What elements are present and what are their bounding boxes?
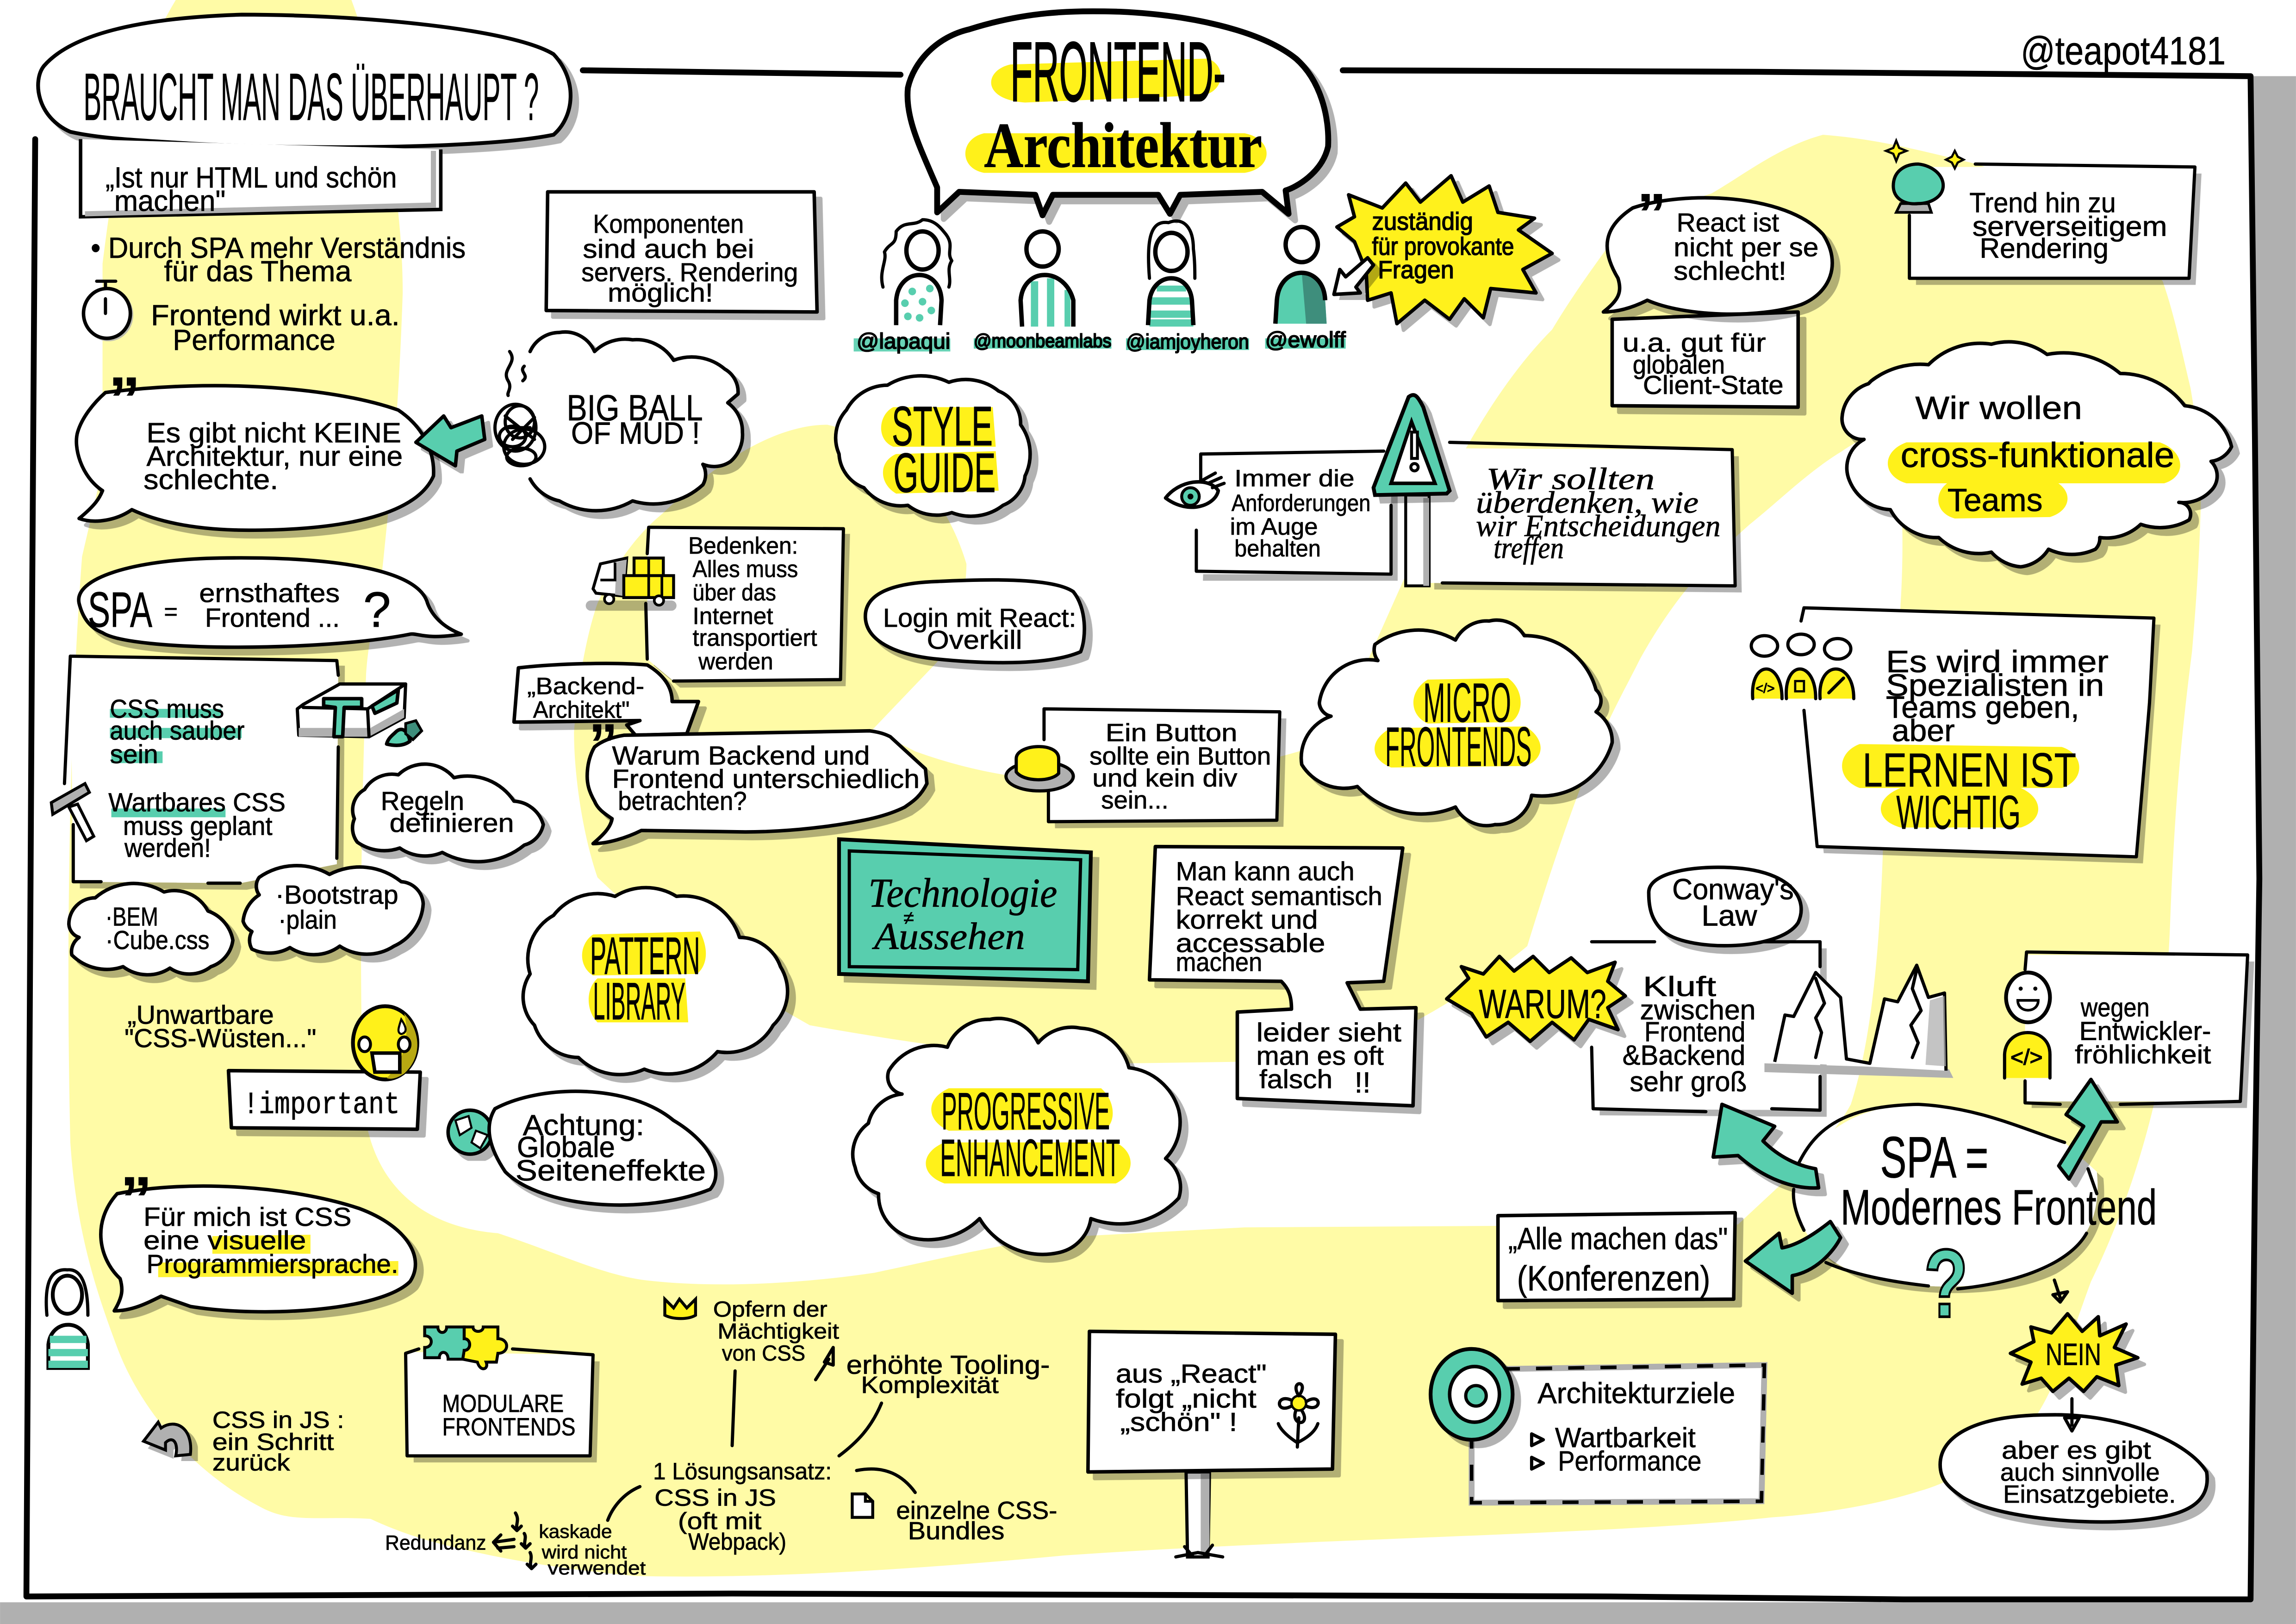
- text: 1 Lösungsansatz CSS in JS: (oft mit: [678, 1508, 761, 1534]
- box: Modulare Frontends: [405, 1349, 593, 1456]
- bubble: Achtung globale Seiteneffekte: [489, 1091, 716, 1205]
- arrow: teal from ball of mud: [416, 416, 485, 466]
- text: 1 Lösungsansatz CSS in JS: CSS in JS: [654, 1484, 776, 1511]
- text: Unwartbare CSS-Wüsten: „Unwartbare: [127, 1000, 274, 1030]
- box: Komponenten: servers. Rendering: [581, 257, 798, 287]
- quote bubble: React ist nicht per se schlecht: [1603, 181, 1832, 314]
- box: Modulare Frontends: MODULARE: [442, 1390, 564, 1418]
- bubble: aber es gibt sinnvolle Einsatzgebiete: Einsatzgebiete.: [2003, 1480, 2176, 1508]
- cloud: Wir wollen cross-funktionale Teams: cross-funktionale: [1901, 436, 2174, 475]
- box: !important: [229, 1071, 420, 1129]
- icon: three developers: </>: [1755, 681, 1775, 696]
- bubble: SPA = ernsthaftes Frontend: ernsthaftes: [199, 578, 340, 608]
- text: Kaskade wird nicht verwendet: kaskade: [539, 1521, 612, 1542]
- text: Durch SPA: • Durch SPA mehr Verständnis: [91, 232, 466, 264]
- quote bubble: Es gibt nicht KEINE Architektur: Es gibt nicht KEINE: [146, 417, 401, 448]
- quote bubble: Es gibt nicht KEINE Architektur: [76, 364, 434, 530]
- sign: aus React folgt nicht schön: [1088, 1331, 1335, 1557]
- icon: truck: [586, 558, 677, 611]
- icon: crystal ball: [1886, 141, 1964, 212]
- quote bubble: Warum Backend und Frontend: ”: [589, 711, 618, 777]
- cloud: BEM Cube.css: [69, 883, 233, 975]
- box: Kluft zwischen Frontend und Backend: sehr groß: [1630, 1066, 1747, 1097]
- box: CSS muss sauber sein: muss geplant: [123, 811, 273, 841]
- quote bubble: Es gibt nicht KEINE Architektur: ”: [108, 364, 141, 436]
- box: wegen Entwicklerfröhlichkeit: fröhlichkeit: [2075, 1040, 2211, 1069]
- icon: teal question mark: ?: [1924, 1230, 1968, 1337]
- icon: stone block with slime: [297, 684, 422, 745]
- text: leider sieht man es oft falsch: man es oft: [1257, 1041, 1384, 1071]
- text: einzelne CSS-Bundles: Bundles: [908, 1517, 1004, 1545]
- presenter: iamjoyheron: @iamjoyheron: [1126, 331, 1249, 353]
- box: Ein Button: sollte ein Button: [1089, 742, 1271, 770]
- bubble: Backend-Architekt: Architekt": [533, 696, 630, 723]
- arrow: up-right tooling: [815, 1348, 833, 1380]
- icon: warning sign: [1374, 395, 1450, 586]
- box: Man kann auch React semantisch: korrekt und: [1176, 905, 1318, 935]
- icon: crown: [665, 1299, 696, 1318]
- cloud: Conway's Law: Law: [1701, 900, 1757, 932]
- box: Ein Button: [1044, 709, 1280, 822]
- box: Alle machen das: (Konferenzen): [1517, 1259, 1710, 1298]
- arrow: SPA to Alle machen das: [1745, 1222, 1841, 1293]
- box: Ein Button: Ein Button: [1106, 719, 1237, 747]
- mind map connectors: [608, 1371, 915, 1520]
- cloud: Regeln definieren: definieren: [390, 808, 514, 838]
- text: Durch SPA: für das Thema: [164, 255, 352, 287]
- sign: aus React folgt nicht schön: „schön" !: [1120, 1407, 1237, 1437]
- box: Ist nur HTML: „Ist nur HTML und schön: [106, 162, 397, 194]
- box: Ist nur HTML: [81, 139, 441, 218]
- bubble: Backend-Architekt: [514, 663, 698, 735]
- starburst: Nein: [2010, 1314, 2138, 1392]
- cloud: Progressive Enhancement: PROGRESSIVE: [941, 1082, 1110, 1141]
- cloud: Style Guide: GUIDE: [893, 442, 996, 504]
- text: Kaskade wird nicht verwendet: verwendet: [548, 1557, 646, 1579]
- cloud: BEM Cube.css: ·Cube.css: [106, 925, 210, 955]
- icon: happy developer: [2004, 973, 2050, 1078]
- box: Es wird immer Spezialisten: LERNEN IST: [1862, 743, 2076, 797]
- box: Immer die Anforderungen: behalten: [1234, 535, 1321, 562]
- box: Komponenten: [546, 192, 817, 312]
- cloud: Conway's Law: Conway's: [1672, 874, 1794, 906]
- cloud: Micro Frontends: [1301, 620, 1612, 825]
- bubble: SPA = ernsthaftes Frontend: Frontend ...: [205, 603, 340, 633]
- icon: target: [1431, 1349, 1512, 1440]
- box: Kluft zwischen Frontend und Backend: zwischen: [1640, 994, 1755, 1025]
- quote bubble: React ist nicht per se schlecht: React ist: [1677, 208, 1779, 237]
- text: Frontend wirkt: [151, 299, 400, 356]
- box: Bedenken: Alles muss: [693, 556, 798, 582]
- presenter: ewolff: [1265, 227, 1346, 352]
- handle: @teapot4181: @teapot4181: [2021, 29, 2226, 73]
- box: Wir sollten überdenken: treffen: [1493, 531, 1564, 565]
- highlight strokes: [110, 709, 242, 817]
- box: Immer die Anforderungen: Anforderungen: [1232, 490, 1370, 516]
- box: Trend hin zu serverseitigem Rendering: Rendering: [1980, 233, 2109, 264]
- cloud: Wir wollen cross-funktionale Teams: [1842, 342, 2232, 567]
- box: Kluft zwischen Frontend und Backend: Kluft: [1643, 971, 1716, 1002]
- text: Opfern der Mächtigkeit von CSS: Opfern der: [713, 1297, 828, 1322]
- box: Ein Button: sein...: [1101, 786, 1169, 814]
- bubble: aber es gibt sinnvolle Einsatzgebiete: auch sinnvolle: [2000, 1459, 2160, 1487]
- bubble: Backend-Architekt: „Backend-: [527, 673, 644, 700]
- box: Es wird immer Spezialisten: WICHTIG: [1896, 786, 2021, 840]
- box: Wir sollten überdenken: Wir sollten: [1486, 462, 1655, 496]
- sign: aus React folgt nicht schön: folgt „nicht: [1116, 1384, 1257, 1413]
- box: Bedenken: [646, 527, 843, 681]
- icon: back arrow: [143, 1422, 191, 1456]
- presenter: iamjoyheron: [1126, 221, 1249, 353]
- cloud: Bootstrap plain: ·plain: [278, 905, 337, 935]
- bubble: Achtung globale Seiteneffekte: Achtung:: [523, 1109, 644, 1142]
- box: CSS muss sauber sein: CSS muss: [110, 694, 224, 724]
- cloud: Wir wollen cross-funktionale Teams: Teams: [1948, 482, 2043, 518]
- quote bubble: Warum Backend und Frontend: Warum Backend und: [612, 741, 870, 770]
- quote bubble: Für mich ist CSS: eine visuelle: [143, 1226, 306, 1255]
- box: wegen Entwicklerfröhlichkeit: Entwickler-: [2079, 1016, 2211, 1046]
- box: Es wird immer Spezialisten: Spezialisten in: [1886, 668, 2104, 703]
- text: CSS in JS ein Schritt zurück: [212, 1407, 344, 1475]
- box: Wir sollten überdenken: [1428, 442, 1735, 586]
- presenter: ewolff: @ewolff: [1265, 328, 1346, 352]
- box: Bedenken: Internet: [693, 603, 773, 629]
- box: Immer die Anforderungen: im Auge: [1230, 513, 1318, 540]
- text: einzelne CSS-Bundles: einzelne CSS-: [896, 1497, 1057, 1524]
- box: Ein Button: und kein div: [1092, 764, 1238, 792]
- box: u.a. gut für globalen Client-State: u.a. gut für: [1623, 328, 1766, 357]
- cloud: Big ball of mud: BIG BALL: [566, 387, 703, 428]
- quote bubble: Warum Backend und Frontend: betrachten?: [618, 787, 747, 816]
- headline bubble: Braucht man das überhaupt: [38, 15, 571, 147]
- icon: globe: [448, 1110, 492, 1154]
- text: Unwartbare CSS-Wüsten: [124, 1000, 316, 1053]
- box: Man kann auch React semantisch: [1150, 847, 1416, 1106]
- box: Kluft zwischen Frontend und Backend: &Backend: [1623, 1040, 1745, 1071]
- arrow: Nein to bubble: [2065, 1399, 2079, 1431]
- text: Kaskade wird nicht verwendet: wird nicht: [541, 1541, 627, 1562]
- bubble: aber es gibt sinnvolle Einsatzgebiete: aber es gibt: [2002, 1437, 2151, 1464]
- icon: flower: [1278, 1384, 1318, 1447]
- arrow: SPA to Kluft: [1713, 1104, 1819, 1188]
- icon: canyon gap: [1764, 965, 1954, 1078]
- box: wegen Entwicklerfröhlichkeit: [2025, 952, 2247, 1104]
- arrow: SPA to Entwicklerfröhlichkeit: [2059, 1080, 2117, 1179]
- cloud: Pattern Library: LIBRARY: [593, 972, 685, 1031]
- cloud: Regeln definieren: [353, 764, 543, 862]
- box: Immer die Anforderungen: [1196, 451, 1391, 574]
- icon: push button: [1006, 747, 1073, 791]
- box: Wir sollten überdenken: überdenken, wie: [1476, 486, 1699, 519]
- text: erhöhte Tooling-Komplexität: [846, 1350, 1050, 1398]
- box: Komponenten: sind auch bei: [583, 234, 754, 264]
- box: CSS muss sauber sein: werden!: [124, 833, 211, 863]
- text: Opfern der Mächtigkeit von CSS: Mächtigkeit: [717, 1319, 839, 1344]
- cloud: Style Guide: STYLE: [892, 395, 993, 457]
- cloud: Progressive Enhancement: ENHANCEMENT: [940, 1129, 1120, 1188]
- box: Technologie ≠ Aussehen: [839, 839, 1091, 981]
- box: CSS muss sauber sein: Wartbares CSS: [108, 788, 286, 818]
- squiggle arrows: [512, 1513, 536, 1568]
- box: Kluft zwischen Frontend und Backend: [1592, 942, 1820, 1112]
- box: Man kann auch React semantisch: machen: [1176, 948, 1262, 977]
- box: Bedenken: transportiert: [693, 625, 817, 651]
- arrow: to ewolff: [1334, 258, 1374, 294]
- icon: happy developer: </>: [2010, 1045, 2043, 1070]
- box: u.a. gut für globalen Client-State: globalen: [1633, 350, 1725, 380]
- cloud: Pattern Library: PATTERN: [590, 927, 700, 986]
- text: Unwartbare CSS-Wüsten: "CSS-Wüsten...": [124, 1024, 316, 1053]
- title bubble: Frontend-Architektur: Architektur: [984, 110, 1262, 181]
- quote bubble: Es gibt nicht KEINE Architektur: Architektur, nur eine: [146, 441, 403, 472]
- quote bubble: Warum Backend und Frontend: Frontend unterschiedlich: [612, 764, 920, 794]
- bubble: SPA = ernsthaftes Frontend: =: [164, 598, 178, 625]
- text: leider sieht man es oft falsch: falsch: [1259, 1065, 1332, 1094]
- text: CSS in JS ein Schritt zurück: ein Schritt: [212, 1429, 334, 1455]
- icon: person: [46, 1270, 88, 1368]
- dashed box: Architekturziele: Performance: [1558, 1445, 1701, 1476]
- text: erhöhte Tooling-Komplexität: Komplexität: [861, 1372, 999, 1398]
- arrow: to Nein: [2053, 1280, 2067, 1302]
- bubble: Login mit React: Overkill: [927, 625, 1022, 655]
- box: Alle machen das: „Alle machen das": [1508, 1222, 1728, 1256]
- dashed box: Architekturziele: Wartbarkeit: [1555, 1422, 1696, 1453]
- bubble: SPA = ernsthaftes Frontend: SPA: [88, 582, 152, 637]
- box: CSS muss sauber sein: sein: [110, 739, 158, 769]
- starburst: zuständig für provokante Fragen: [1334, 176, 1552, 324]
- cloud: Wir wollen cross-funktionale Teams: Wir wollen: [1915, 390, 2082, 426]
- cloud: Bootstrap plain: ·Bootstrap: [275, 880, 398, 910]
- cloud: Regeln definieren: Regeln: [381, 787, 464, 816]
- quote bubble: Warum Backend und Frontend: [587, 711, 927, 843]
- bubble: Achtung globale Seiteneffekte: Seiteneffekte: [516, 1155, 706, 1187]
- bubble: SPA = Modernes Frontend: SPA =: [1880, 1124, 1989, 1190]
- box: CSS muss sauber sein: [64, 656, 338, 883]
- bubble: Login mit React: Login mit React:: [883, 603, 1076, 633]
- text: Frontend wirkt: Performance: [173, 324, 336, 356]
- dashed box: Architekturziele: [1472, 1365, 1764, 1503]
- box: Man kann auch React semantisch: React semantisch: [1176, 881, 1382, 911]
- cloud: Big ball of mud: OF MUD !: [571, 417, 700, 451]
- box: Es wird immer Spezialisten: Es wird immer: [1886, 645, 2109, 679]
- text: leider sieht man es oft falsch: [1257, 1018, 1401, 1099]
- box: Bedenken: werden: [698, 648, 773, 675]
- text: Opfern der Mächtigkeit von CSS: [713, 1297, 839, 1366]
- title bubble: Frontend-Architektur: [908, 11, 1328, 215]
- box: Modulare Frontends: FRONTENDS: [442, 1413, 575, 1441]
- starburst: Warum: [1447, 956, 1625, 1041]
- box: Es wird immer Spezialisten: Teams geben,: [1886, 690, 2079, 725]
- starburst: Nein: NEIN: [2046, 1338, 2101, 1372]
- box: wegen Entwicklerfröhlichkeit: wegen: [2080, 993, 2150, 1023]
- presenter: moonbeamlabs: @moonbeamlabs: [974, 330, 1111, 351]
- text: CSS in JS ein Schritt zurück: CSS in JS :: [212, 1407, 344, 1433]
- box: Bedenken: über das: [693, 579, 776, 606]
- box: Wir sollten überdenken: wir Entscheidungen: [1476, 509, 1721, 543]
- icon: hammer: [51, 784, 94, 841]
- cloud: BEM Cube.css: ·BEM: [106, 902, 158, 932]
- presenter: lapaqui: [854, 220, 952, 354]
- text: Opfern der Mächtigkeit von CSS: von CSS: [722, 1341, 805, 1366]
- quote bubble: Für mich ist CSS: [101, 1164, 416, 1312]
- box: Man kann auch React semantisch: accessable: [1176, 928, 1325, 958]
- icon: tangled scribble: [495, 351, 545, 466]
- text: einzelne CSS-Bundles: [896, 1497, 1057, 1545]
- sketchnote canvas: BRAUCHT MAN DAS ÜBERHAUPT ?: [83, 59, 539, 134]
- box: Alle machen das: [1498, 1213, 1735, 1300]
- text: leider sieht man es oft falsch: !!: [1355, 1067, 1371, 1099]
- cloud: Bootstrap plain: [243, 866, 423, 955]
- text: 1 Lösungsansatz CSS in JS: [653, 1458, 832, 1555]
- bubble: Achtung globale Seiteneffekte: Globale: [517, 1131, 615, 1163]
- box: Immer die Anforderungen: Immer die: [1234, 465, 1355, 491]
- quote bubble: React ist nicht per se schlecht: nicht per se: [1674, 233, 1819, 262]
- icon: file: [852, 1494, 873, 1518]
- box: Es wird immer Spezialisten: [1801, 608, 2154, 857]
- icon: puzzle pieces: [425, 1327, 507, 1369]
- text: erhöhte Tooling-Komplexität: erhöhte Tooling-: [846, 1350, 1050, 1380]
- starburst: Warum: WARUM?: [1479, 981, 1606, 1027]
- bubble: SPA = ernsthaftes Frontend: ?: [363, 582, 391, 637]
- icon: shocked face: [353, 1006, 417, 1080]
- box: Trend hin zu serverseitigem Rendering: serverseitigem: [1972, 211, 2167, 242]
- box: Technologie ≠ Aussehen: Technologie: [868, 870, 1057, 916]
- bubble: Login mit React: [865, 580, 1084, 662]
- cloud: Style Guide: [836, 376, 1030, 516]
- starburst: zuständig für provokante Fragen: Fragen: [1378, 256, 1454, 284]
- box: Trend hin zu serverseitigem Rendering: Trend hin zu: [1969, 187, 2116, 219]
- icon: three developers: [1751, 634, 1854, 699]
- text: leider sieht man es oft falsch: leider sieht: [1257, 1018, 1401, 1047]
- text: Frontend wirkt: Frontend wirkt u.a.: [151, 299, 400, 331]
- text: Redundanz and arrow: Redundanz: [385, 1531, 486, 1554]
- bubble: SPA = Modernes Frontend: Modernes Frontend: [1841, 1180, 2157, 1235]
- sign: aus React folgt nicht schön: aus „React": [1116, 1359, 1267, 1389]
- box: Ist nur HTML: machen": [114, 185, 225, 218]
- cloud: Big ball of mud: [530, 332, 742, 511]
- starburst: zuständig für provokante Fragen: zuständig: [1372, 208, 1473, 236]
- box: Trend hin zu serverseitigem Rendering: [1910, 164, 2195, 278]
- icon: eye: [1165, 473, 1224, 507]
- quote bubble: Für mich ist CSS: Programmiersprache.: [146, 1249, 398, 1279]
- box: !important: !important: [243, 1087, 400, 1122]
- quote bubble: React ist nicht per se schlecht: schlecht!: [1674, 256, 1786, 286]
- starburst: zuständig für provokante Fragen: für provokante: [1372, 232, 1514, 260]
- bubble: aber es gibt sinnvolle Einsatzgebiete: [1940, 1415, 2207, 1522]
- box: u.a. gut für globalen Client-State: [1612, 312, 1798, 407]
- presenter: moonbeamlabs: [974, 231, 1111, 351]
- box: Komponenten: Komponenten: [593, 209, 744, 239]
- bubble: SPA = Modernes Frontend: [1793, 1104, 2157, 1289]
- presenter: lapaqui: @lapaqui: [857, 329, 950, 354]
- cloud: Progressive Enhancement: [853, 1018, 1181, 1255]
- quote bubble: Für mich ist CSS: Für mich ist CSS: [143, 1202, 351, 1232]
- quote bubble: React ist nicht per se schlecht: ”: [1637, 181, 1666, 247]
- quote bubble: Es gibt nicht KEINE Architektur: schlechte.: [143, 464, 278, 495]
- box: Bedenken: Bedenken:: [688, 532, 798, 559]
- cloud: Conway's Law: [1649, 867, 1801, 946]
- text: Kaskade wird nicht verwendet: [539, 1521, 646, 1579]
- text: 1 Lösungsansatz CSS in JS: Webpack): [688, 1528, 786, 1555]
- title bubble: Frontend-Architektur: FRONTEND-: [1010, 24, 1226, 119]
- cloud: Micro Frontends: MICRO: [1423, 672, 1511, 734]
- box: CSS muss sauber sein: auch sauber: [110, 716, 244, 746]
- dashed box: Architekturziele: Architekturziele: [1537, 1377, 1735, 1410]
- quote bubble: Für mich ist CSS: ”: [120, 1164, 152, 1236]
- box: Kluft zwischen Frontend und Backend: Frontend: [1644, 1016, 1745, 1047]
- cloud: Micro Frontends: FRONTENDS: [1385, 716, 1531, 778]
- box: Technologie ≠ Aussehen: Aussehen: [872, 915, 1025, 957]
- box: Es wird immer Spezialisten: aber: [1892, 714, 1955, 748]
- box: Komponenten: möglich!: [608, 278, 713, 308]
- text: Durch SPA: [91, 232, 466, 287]
- text: CSS in JS ein Schritt zurück: zurück: [212, 1449, 290, 1475]
- bubble: SPA = ernsthaftes Frontend: [79, 558, 461, 647]
- cloud: Pattern Library: [523, 887, 788, 1074]
- icon: stopwatch: [83, 281, 133, 341]
- box: u.a. gut für globalen Client-State: Client-State: [1643, 370, 1784, 400]
- text: 1 Lösungsansatz CSS in JS: 1 Lösungsansatz:: [653, 1458, 832, 1484]
- box: Man kann auch React semantisch: Man kann auch: [1176, 856, 1355, 886]
- box: Technologie ≠ Aussehen: ≠: [903, 907, 914, 928]
